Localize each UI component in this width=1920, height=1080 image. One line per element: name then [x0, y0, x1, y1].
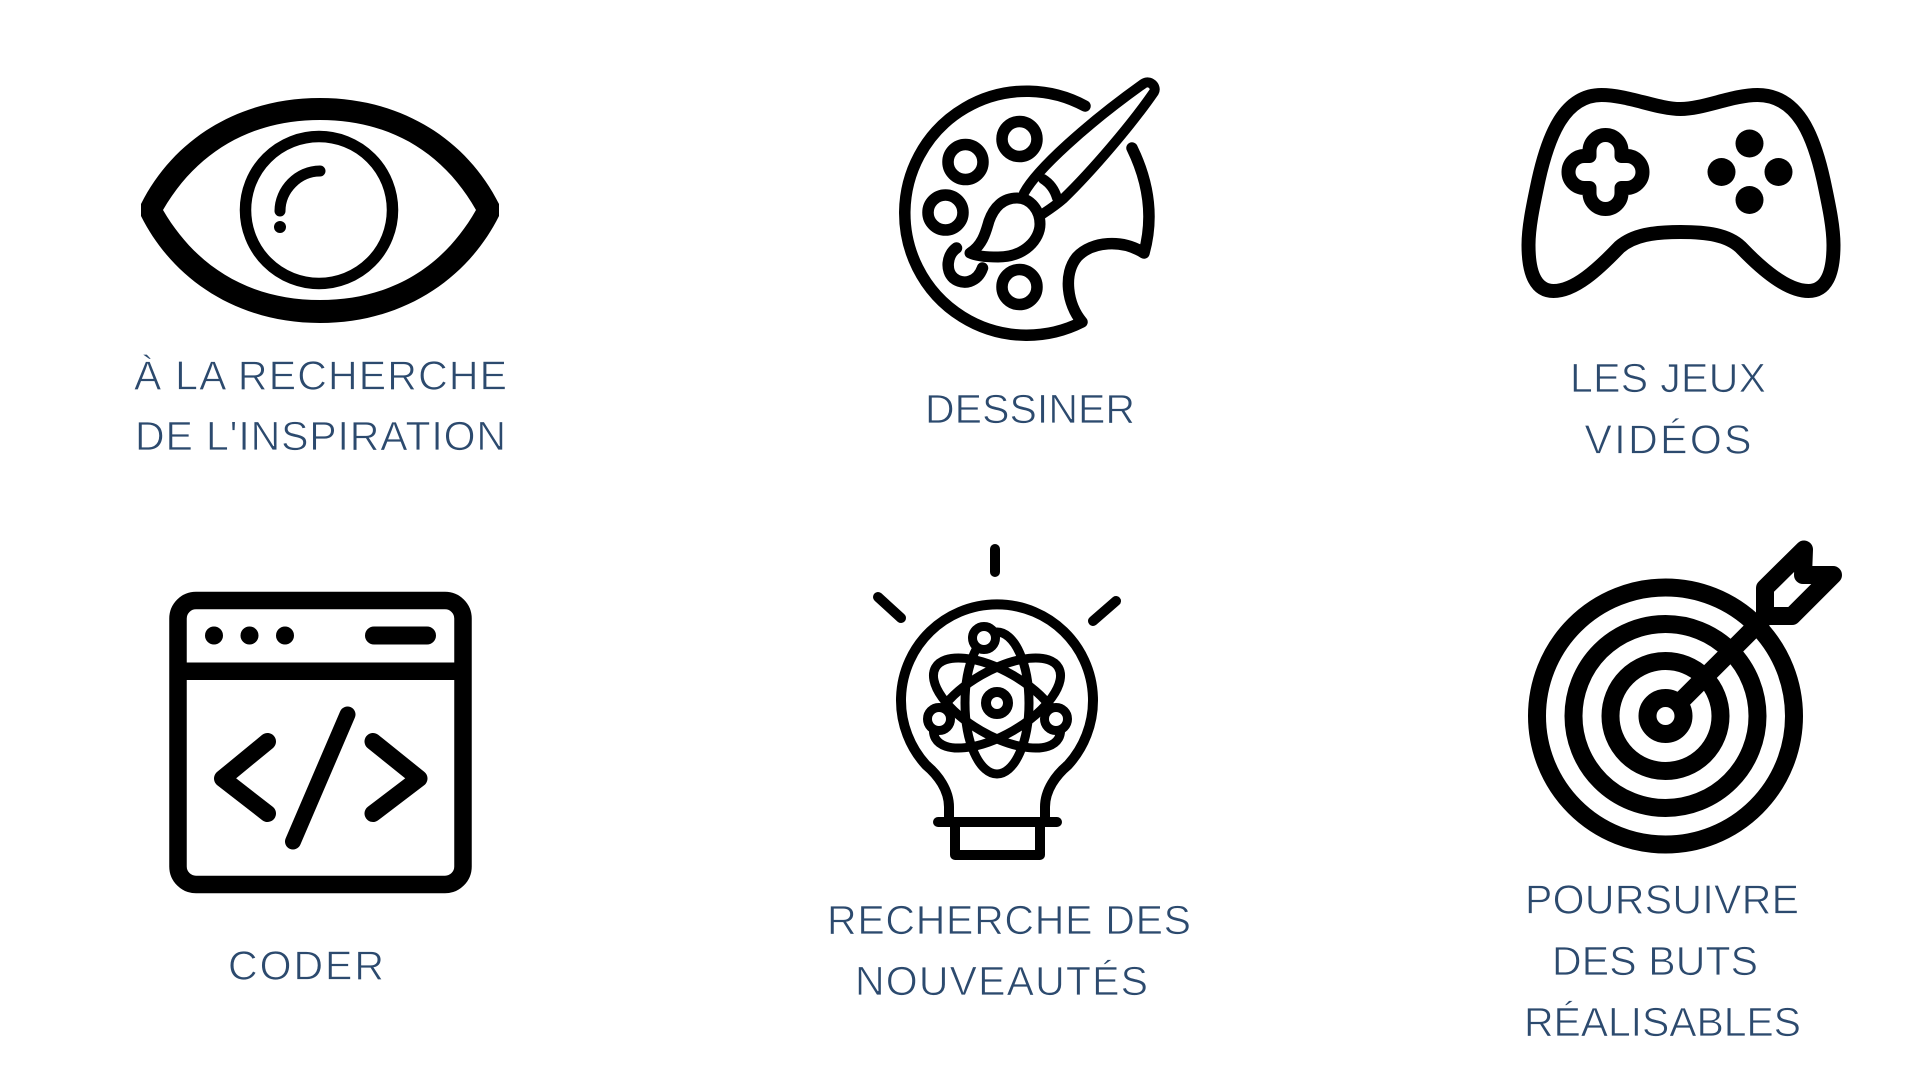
- label: recherche des nouveautés: RECHERCHE DES: [827, 897, 1191, 943]
- icon: painter's palette and brush: [905, 82, 1155, 335]
- icon: target with arrow: [1537, 550, 1833, 844]
- label: les jeux vidéos: [1570, 355, 1766, 462]
- icon: eye: [141, 98, 499, 323]
- label: poursuivre des buts réalisables: [1524, 876, 1801, 1045]
- label: recherche des nouveautés: [827, 897, 1191, 1004]
- label: poursuivre des buts réalisables: DES BUTS: [1552, 938, 1758, 984]
- label: recherche des nouveautés: NOUVEAUTÉS: [855, 958, 1148, 1004]
- label: les jeux vidéos: VIDÉOS: [1584, 416, 1752, 462]
- label: les jeux vidéos: LES JEUX: [1570, 355, 1766, 401]
- label: à la recherche de l'inspiration: DE L'INSPIRATION: [135, 413, 506, 459]
- label: dessiner: DESSINER: [925, 386, 1135, 432]
- icon: game controller: [1528, 95, 1834, 291]
- label: à la recherche de l'inspiration: [134, 352, 507, 459]
- label: poursuivre des buts réalisables: RÉALISABLES: [1524, 999, 1801, 1045]
- label: poursuivre des buts réalisables: POURSUIVRE: [1525, 876, 1799, 922]
- icon: code window: [178, 600, 463, 884]
- label: à la recherche de l'inspiration: À LA RECHERCHE: [134, 352, 507, 398]
- icon: light bulb with atom: [878, 549, 1116, 855]
- label: coder: CODER: [228, 942, 384, 988]
